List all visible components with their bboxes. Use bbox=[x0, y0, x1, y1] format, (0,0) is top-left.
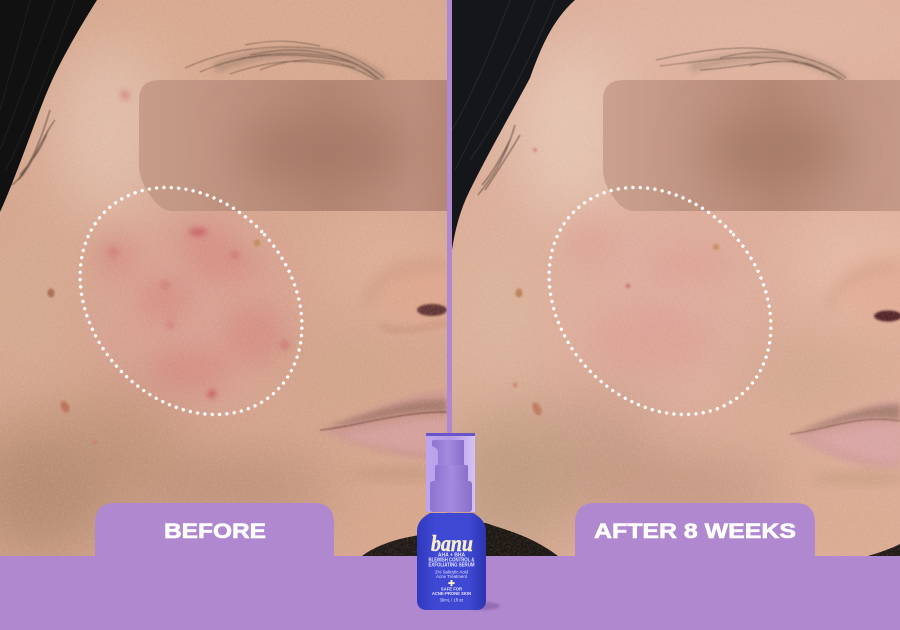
dotted circle: after bbox=[503, 143, 817, 459]
hair band bbox=[0, 0, 97, 212]
bottom band bbox=[0, 556, 900, 630]
hair band bbox=[452, 0, 575, 250]
bottle body bbox=[417, 513, 486, 610]
clear cap bbox=[426, 433, 475, 512]
bottle label text: 2% Salicylic Acid bbox=[435, 570, 469, 574]
label tab: after 8 weeks: AFTER 8 WEEKS bbox=[594, 520, 796, 543]
blurred eye rectangle bbox=[603, 80, 900, 211]
center divider bbox=[447, 0, 452, 556]
collar shadow bbox=[362, 536, 417, 556]
eyebrow bbox=[656, 48, 846, 80]
bottle label text: Acne Treatment bbox=[436, 574, 468, 579]
bottle label text: 30mL / 1fl oz bbox=[440, 598, 463, 602]
redness patches bbox=[580, 229, 687, 354]
bottle label text: SAFE FOR bbox=[441, 586, 462, 592]
nose and nostril bbox=[368, 257, 447, 332]
brand logo: banu bbox=[431, 531, 473, 556]
nose and nostril bbox=[831, 256, 900, 324]
dotted circle: before bbox=[34, 143, 348, 459]
blemishes bbox=[108, 90, 290, 398]
bottle label text: ✚ bbox=[448, 579, 455, 588]
lips bbox=[790, 400, 900, 469]
collar shadow bbox=[484, 523, 558, 556]
fading marks bbox=[512, 148, 719, 417]
product bottle bbox=[417, 433, 500, 610]
eyebrow bbox=[185, 41, 384, 80]
label tab: before: BEFORE bbox=[164, 520, 266, 543]
label tab: before bbox=[95, 503, 334, 557]
bottle label text: BLEMISH CONTROL & bbox=[428, 558, 475, 564]
bottle label text: AHA + BHA bbox=[438, 552, 465, 558]
bottle label text: ACNE-PRONE SKIN bbox=[432, 591, 471, 596]
lips bbox=[320, 390, 447, 459]
bottle label text: EXFOLIATING SERUM bbox=[428, 562, 474, 568]
panel: after photo bbox=[440, 0, 900, 570]
bottle label text bbox=[428, 552, 475, 602]
redness patches bbox=[95, 226, 285, 392]
bottle shadow bbox=[464, 602, 500, 610]
pump head bbox=[432, 440, 464, 466]
blurred eye rectangle bbox=[139, 80, 447, 211]
panel: before photo bbox=[0, 0, 480, 570]
label tab: after 8 weeks bbox=[575, 503, 815, 557]
